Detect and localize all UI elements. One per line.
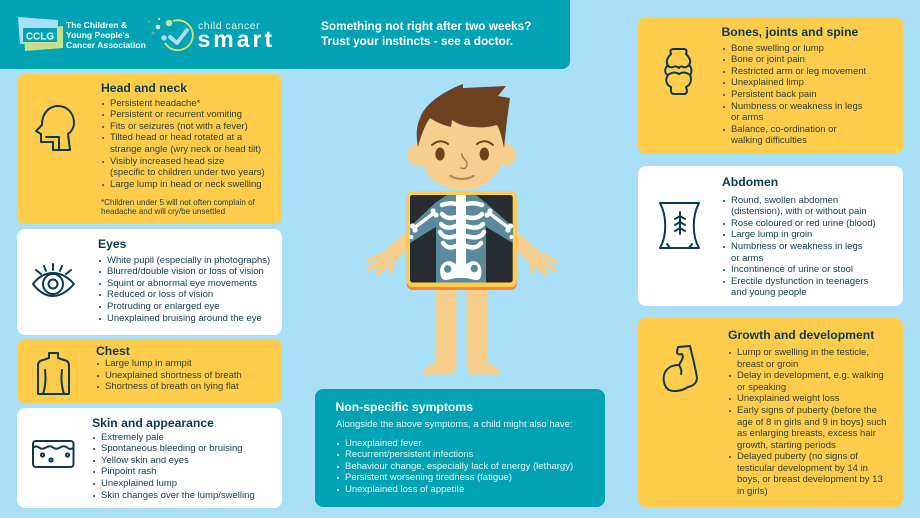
symptom list: Unexplained lump [101,478,177,489]
heading: Bones, joints and spine [722,25,858,39]
symptom list: Erectile dysfunction in teenagers [731,276,868,287]
symptom list: testicular development by 14 in [737,463,868,474]
symptom list: Restricted arm or leg movement [731,66,866,77]
charity name: Cancer Association [66,40,146,50]
symptom list: Persistent back pain [731,89,817,100]
symptom list: (specific to children under two years) [110,167,265,178]
symptom list: Unexplained loss of appetite [345,484,464,495]
symptom list: boys, or breast development by 13 [737,474,883,485]
symptom list: Blurred/double vision or loss of vision [107,266,264,277]
icon: eye [32,263,75,297]
symptom list: Persistent or recurrent vomiting [110,109,242,120]
charity name: Young People's [66,30,129,40]
panel: eyes [17,229,282,335]
header message: Something not right after two weeks? [321,18,531,32]
panel: abdomen [638,166,903,306]
symptom list: strange angle (wry neck or head tilt) [110,144,261,155]
symptom list: Tilted head or head rotated at a [110,132,242,143]
symptom list: or arms [731,253,763,264]
symptom list: in girls) [737,486,768,497]
panel: head and neck [17,74,282,224]
symptom list: Bone swelling or lump [731,43,824,54]
symptom list [93,432,255,501]
footnote [101,198,255,216]
symptom list: Balance, co-ordination or [731,124,837,135]
symptom list: Spontaneous bleeding or bruising [101,443,243,454]
symptom list: Persistent worsening tiredness (fatigue) [345,472,512,483]
symptom list: Shortness of breath on lying flat [105,381,239,392]
footnote: headache and will cry/be unsettled [101,207,225,216]
logo: CCLG: CCLG [26,32,54,42]
symptom list: Behaviour change, especially lack of energy (lethargy) [345,461,573,472]
symptom list: Delayed puberty (no signs of [737,451,858,462]
symptom list: Unexplained fever [345,438,422,449]
symptom list [729,347,886,497]
symptom list: Fits or seizures (not with a fever) [110,121,248,132]
symptom list: Incontinence of urine or stool [731,264,853,275]
symptom list: Lump or swelling in the testicle, [737,347,869,358]
symptom list: as enlarging breasts, excess hair [737,428,876,439]
symptom list: Delay in development, e.g. walking [737,370,884,381]
symptom list [99,255,270,324]
symptom list: growth, starting periods [737,440,836,451]
logo: check mark [148,18,194,52]
symptom list: Persistent headache* [110,98,200,109]
symptom list [97,358,242,392]
icon: skin [32,440,74,468]
x-ray frame [407,191,517,290]
symptom list [102,98,265,190]
icon: flexed arm [662,345,698,392]
symptom list: breast or groin [737,359,798,370]
heading: Chest [96,344,130,358]
symptom list [723,43,866,146]
symptom list: Numbness or weakness in legs [731,241,862,252]
head [407,84,516,190]
icon: torso [37,352,70,395]
header message [321,18,531,48]
charity name [66,20,146,50]
limbs [367,232,556,374]
panel: skin and appearance [17,408,282,508]
logo text: smart: smart [198,26,275,52]
icon: head [34,105,75,151]
charity name: The Children & [66,20,127,30]
symptom list: Extremely pale [101,432,164,443]
footnote: *Children under 5 will not often complain of [101,198,255,206]
heading: Abdomen [722,175,778,189]
icon: knee joint [664,48,692,95]
heading: Eyes [98,237,126,251]
intro text: Alongside the above symptoms, a child might also have: [336,419,573,430]
symptom list: Large lump in groin [731,229,812,240]
logo text: child cancer [198,20,260,32]
symptom list: Large lump in armpit [105,358,192,369]
symptom list: and young people [731,287,807,298]
symptom list [723,195,876,298]
symptom list: Pinpoint rash [101,466,156,477]
symptom list: Early signs of puberty (before the [737,405,877,416]
symptom list: Bone or joint pain [731,54,805,65]
panel: growth and development [638,318,903,507]
symptom list: walking difficulties [731,135,807,146]
symptom list: Unexplained weight loss [737,393,839,404]
symptom list: Round, swollen abdomen [731,195,838,206]
symptom list: Large lump in head or neck swelling [110,179,262,190]
symptom list: Reduced or loss of vision [107,289,213,300]
heading: Non-specific symptoms [336,400,473,414]
symptom list: Protruding or enlarged eye [107,301,220,312]
icon: abdomen [659,202,700,249]
heading: Skin and appearance [92,416,214,430]
header message: Trust your instincts - see a doctor. [321,34,513,48]
symptom list: Rose coloured or red urine (blood) [731,218,876,229]
symptom list: age of 8 in girls and 9 in boys) such [737,417,886,428]
symptom list: Unexplained limp [731,77,804,88]
header banner [0,0,570,69]
symptom list: Squint or abnormal eye movements [107,278,257,289]
panel: chest [17,339,282,403]
symptom list: Unexplained shortness of breath [105,370,242,381]
illustration: child with x-ray [366,84,557,374]
panel: bones, joints and spine [638,17,903,154]
symptom list: Skin changes over the lump/swelling [101,490,255,501]
heading: Head and neck [101,81,187,95]
symptom list: White pupil (especially in photographs) [107,255,270,266]
symptom list: Unexplained bruising around the eye [107,313,262,324]
panel: non-specific symptoms [315,389,605,507]
symptom list [337,438,573,495]
symptom list: Recurrent/persistent infections [345,449,473,460]
symptom list: Yellow skin and eyes [101,455,189,466]
symptom list: or speaking [737,382,786,393]
symptom list: Numbness or weakness in legs [731,101,862,112]
symptom list: (distension), with or without pain [731,206,867,217]
symptom list: or arms [731,112,763,123]
logo: CCLG [18,17,63,51]
heading: Growth and development [728,328,874,342]
symptom list: Visibly increased head size [110,156,224,167]
